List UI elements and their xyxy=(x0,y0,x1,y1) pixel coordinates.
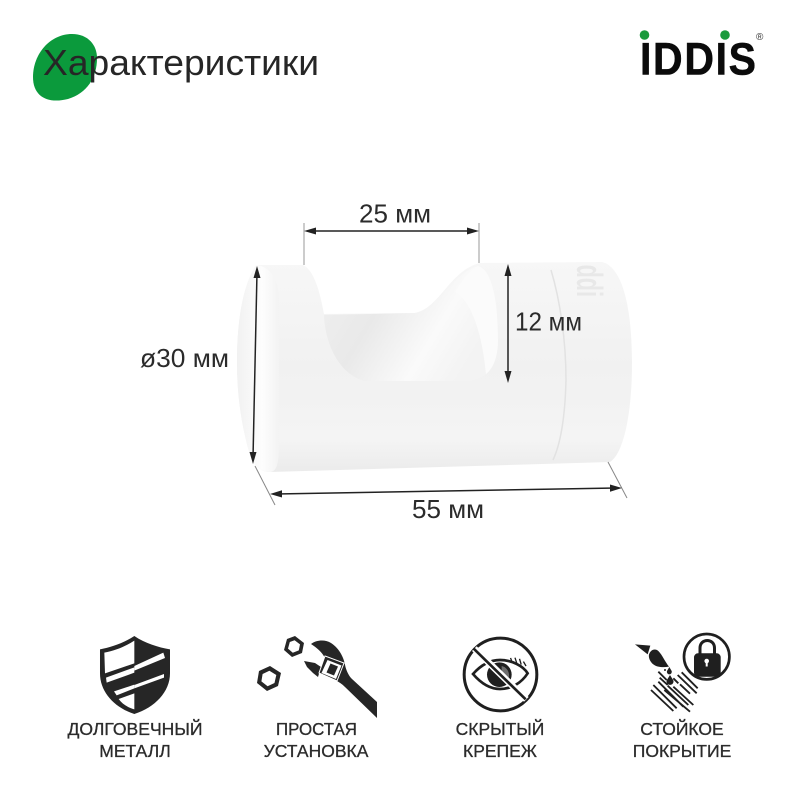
feature: hidden mount xyxy=(456,638,544,761)
hook notch highlight xyxy=(455,266,498,374)
icon: crossed-out eye xyxy=(464,638,537,711)
hook notch xyxy=(324,266,498,381)
dimension: diameter 30 mm xyxy=(140,266,260,464)
green blob xyxy=(33,34,97,101)
icon: wrench and nuts xyxy=(257,636,377,718)
title with green blob xyxy=(33,34,319,101)
label 30 mm: ø30 мм xyxy=(140,343,229,373)
label 55 mm: 55 мм xyxy=(412,494,484,524)
label: ДОЛГОВЕЧНЫЙ xyxy=(68,718,202,739)
feature: easy installation xyxy=(257,636,377,761)
dimension: 12 mm xyxy=(504,264,582,383)
label: ПОКРЫТИЕ xyxy=(633,741,731,761)
label: СКРЫТЫЙ xyxy=(456,718,544,739)
icon: shield xyxy=(100,636,170,714)
seam line xyxy=(551,270,566,460)
dimension: 25 mm xyxy=(304,198,479,265)
feature: durable coating xyxy=(633,634,731,761)
feature: durable metal xyxy=(68,636,202,761)
nut xyxy=(284,636,304,657)
end cap xyxy=(237,265,279,472)
dimension: 55 mm xyxy=(255,462,627,524)
label: МЕТАЛЛ xyxy=(99,741,171,761)
label: УСТАНОВКА xyxy=(264,741,369,761)
label 25 mm: 25 мм xyxy=(359,198,431,228)
hook body xyxy=(237,262,632,472)
label 12 mm: 12 мм xyxy=(515,306,582,336)
label: КРЕПЕЖ xyxy=(463,741,537,761)
label: СТОЙКОЕ xyxy=(640,718,724,739)
embossed mark: iddi xyxy=(569,259,609,297)
logo: IDDIS: ® xyxy=(756,32,764,43)
label: ПРОСТАЯ xyxy=(276,719,357,739)
nut xyxy=(257,666,281,691)
product: white hook xyxy=(237,259,632,472)
heading: Характеристики xyxy=(43,42,319,83)
icon: paintbrush and lock xyxy=(635,634,729,712)
logo: IDDIS: IDDIS xyxy=(640,35,756,85)
